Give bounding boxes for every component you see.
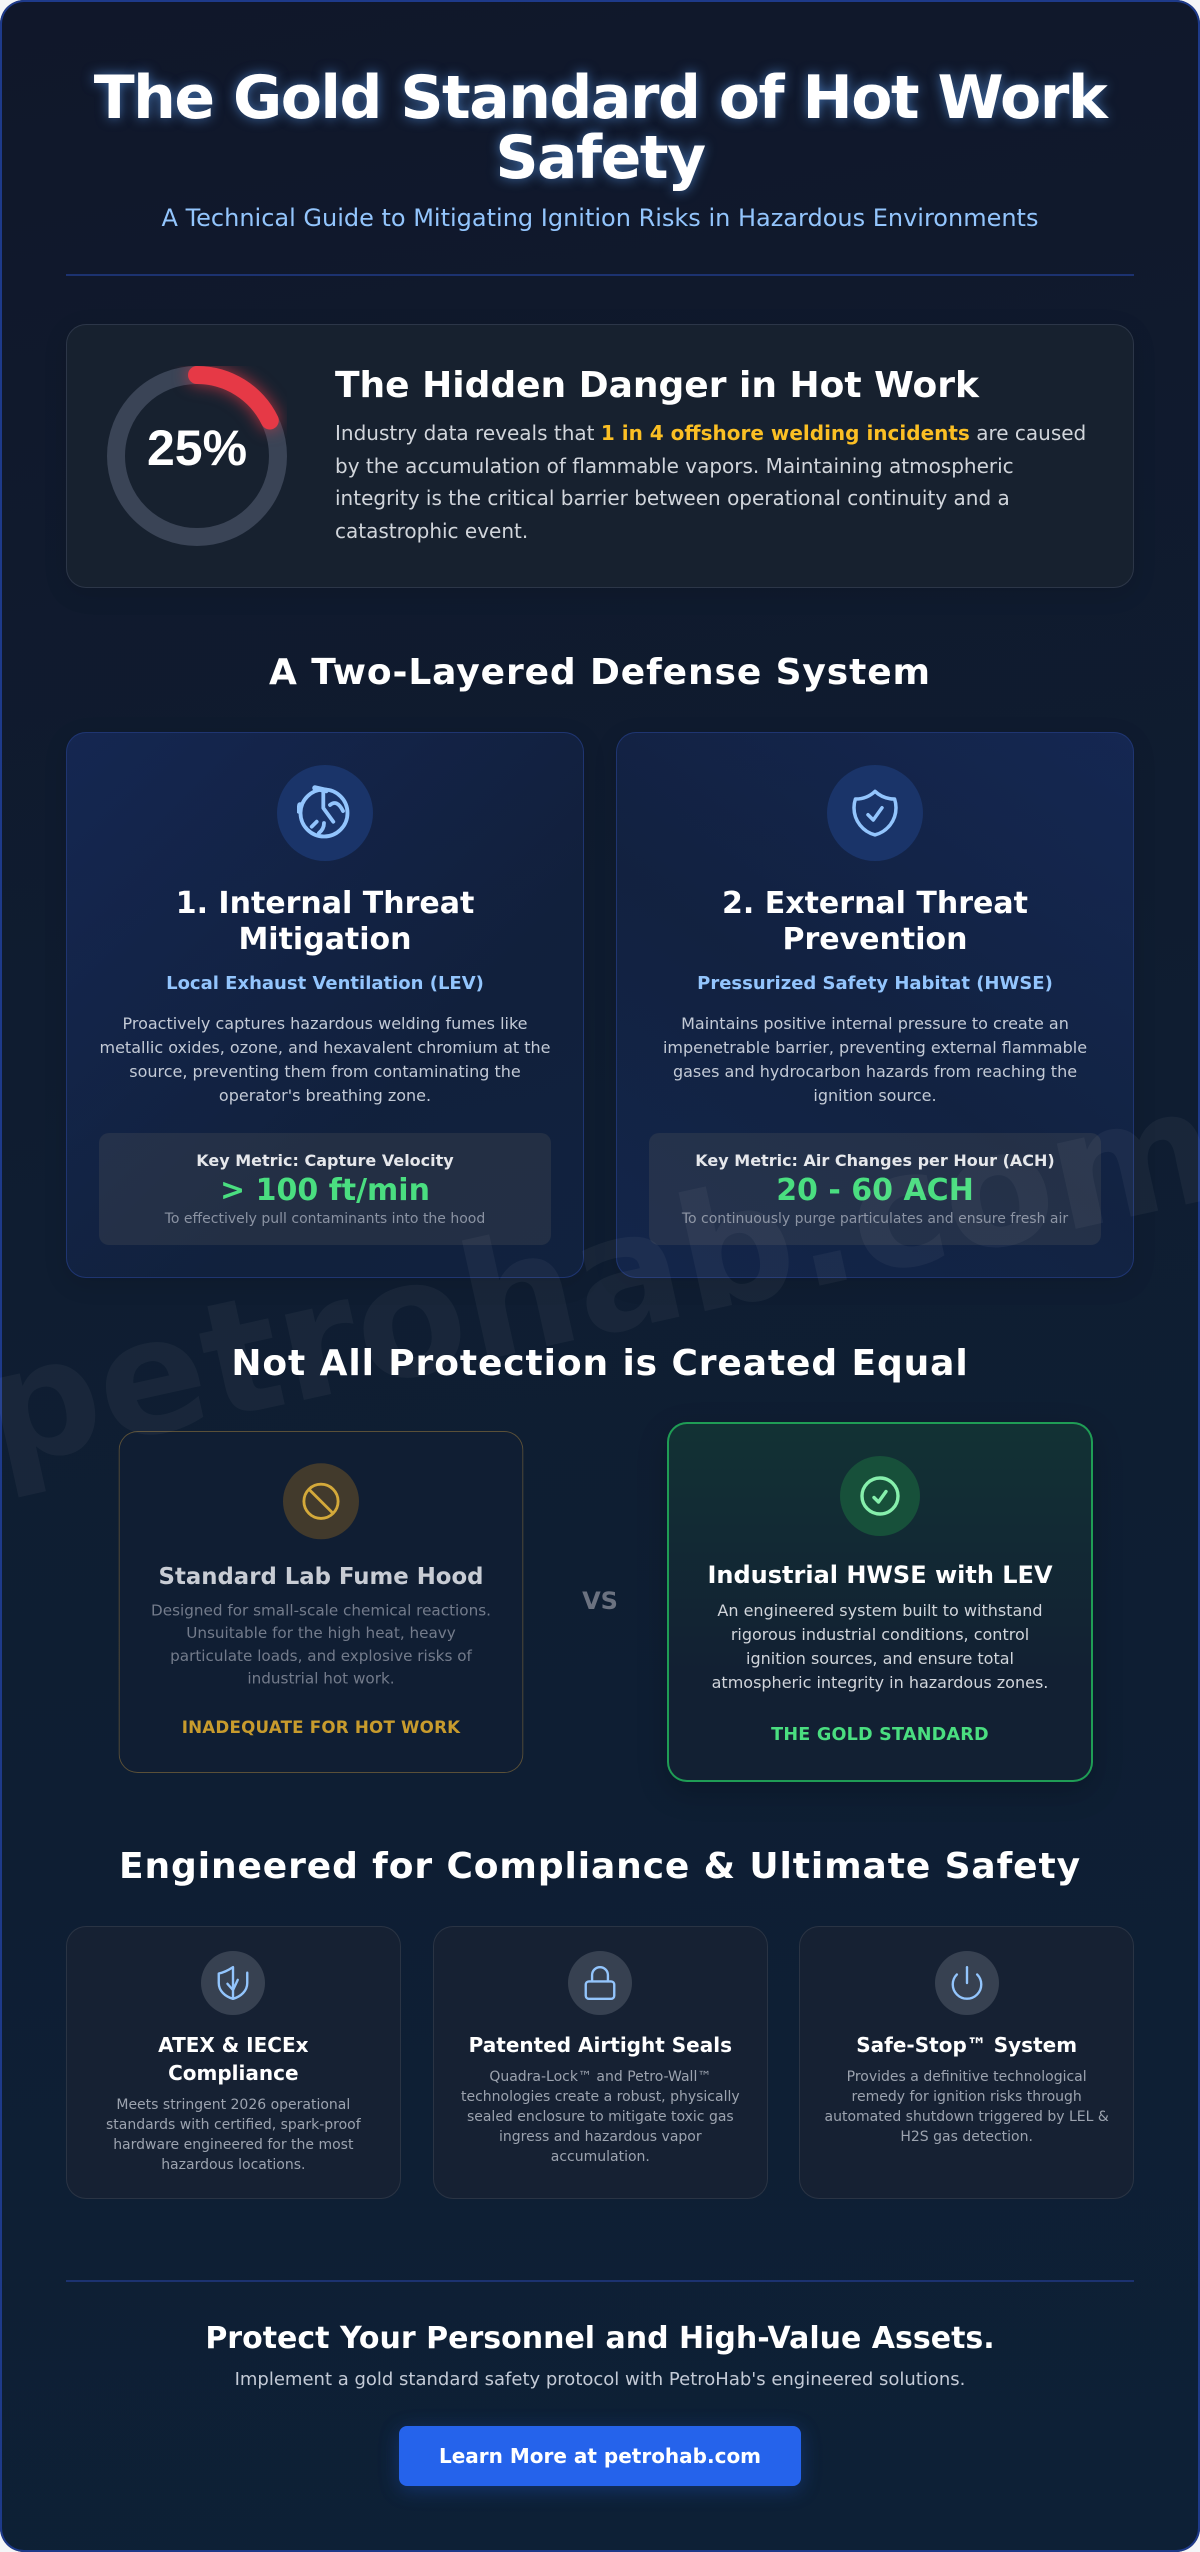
description: particulate loads, and explosive risks of [170,1647,471,1665]
description: Quadra-Lock™ and Petro-Wall™ [489,2069,711,2085]
description: atmospheric integrity in hazardous zones. [712,1673,1048,1692]
description: Unsuitable for the high heat, heavy [186,1624,455,1642]
heading: 1. Internal Threat [176,886,474,921]
description: Meets stringent 2026 operational [116,2097,350,2113]
metric note: To continuously purge particulates and ensure fresh air [682,1211,1068,1227]
call to action heading: Protect Your Personnel and High-Value Assets. [205,2321,995,2356]
verdict badge: THE GOLD STANDARD [771,1725,989,1745]
verdict badge: INADEQUATE FOR HOT WORK [181,1719,460,1738]
description [712,1601,1048,1692]
panel: industrial hwse [667,1422,1093,1782]
description: remedy for ignition risks through [852,2089,1082,2105]
description: technologies create a robust, physically [461,2089,740,2105]
heading: hidden danger: The Hidden Danger in Hot Work [335,364,979,406]
donut chart: 25%: 25% [147,420,247,476]
icon: power [935,1951,999,2015]
heading: not all protection: Not All Protection is Created Equal [231,1342,969,1384]
heading: Safe-Stop™ System [856,2033,1077,2057]
description [461,2069,740,2165]
description: rigorous industrial conditions, control [731,1625,1029,1644]
text: hidden danger body [335,421,1086,543]
description [663,1014,1087,1105]
description: standards with certified, spark-proof [106,2117,361,2133]
heading [158,2033,309,2085]
heading: Prevention [782,922,967,957]
icon: check circle [840,1456,920,1536]
subtitle: A Technical Guide to Mitigating Ignition Risks in Hazardous Environments [162,204,1038,232]
heading: engineered for compliance: Engineered for Compliance & Ultimate Safety [119,1846,1081,1886]
metric note: To effectively pull contaminants into the hood [165,1211,485,1227]
icon: shield [201,1951,265,2015]
title: Safety [495,122,705,192]
description: impenetrable barrier, preventing external flammable [663,1038,1087,1057]
description: operator's breathing zone. [219,1086,431,1105]
icon: shield check [827,765,923,861]
heading: 2. External Threat [722,886,1028,921]
description: sealed enclosure to mitigate toxic gas [467,2109,734,2125]
metric label: Key Metric: Air Changes per Hour (ACH) [695,1150,1055,1170]
vs label: VS [582,1587,618,1615]
heading: two-layered defense: A Two-Layered Defense System [269,652,931,692]
description [151,1601,490,1688]
heading: Compliance [168,2061,299,2085]
title [88,62,1112,198]
panel: safe-stop [799,1926,1134,2199]
description: industrial hot work. [247,1670,394,1688]
metric value: 20 - 60 ACH [776,1173,974,1208]
title: The Gold Standard of Hot Work [94,62,1106,132]
description: ignition source. [813,1086,937,1105]
donut chart: 25% [107,366,287,546]
metric label: Key Metric: Capture Velocity [196,1150,454,1170]
description: Provides a definitive technological [847,2069,1087,2085]
description [825,2069,1109,2145]
description: ignition sources, and ensure total [746,1649,1014,1668]
description: source, preventing them from contaminating the [129,1062,521,1081]
description: hardware engineered for the most [113,2137,353,2153]
description: hazardous locations. [161,2157,305,2173]
heading: Industrial HWSE with LEV [707,1561,1053,1589]
key metric [99,1133,551,1245]
description: accumulation. [551,2149,650,2165]
button: Learn More at petrohab.com [439,2444,761,2468]
subheading: Local Exhaust Ventilation (LEV) [166,973,484,994]
button [399,2426,801,2486]
panel: hidden danger [66,324,1134,588]
key metric [649,1133,1101,1245]
icon: prohibited [282,1463,358,1539]
call to action text: Implement a gold standard safety protocol with PetroHab's engineered solutions. [235,2369,965,2390]
text: hidden danger body: integrity is the critical barrier between operational continuity and a [335,486,1010,510]
metric value: > 100 ft/min [220,1173,430,1208]
description [99,1014,551,1105]
panel: internal threat [66,732,584,1278]
description: metallic oxides, ozone, and hexavalent chromium at the [99,1038,551,1057]
text: hidden danger body: catastrophic event. [335,519,528,543]
text: hidden danger body: by the accumulation of flammable vapors. Maintaining atmospheric [335,454,1014,478]
heading: Mitigation [238,922,412,957]
panel: airtight seals [433,1926,768,2199]
icon: lock [568,1951,632,2015]
description: Maintains positive internal pressure to create an [681,1014,1069,1033]
panel: atex compliance [66,1926,401,2199]
description: Proactively captures hazardous welding fumes like [122,1014,528,1033]
heading: ATEX & IECEx [158,2033,309,2057]
heading [176,886,474,957]
panel: standard lab fume hood [118,1431,523,1773]
description: An engineered system built to withstand [717,1601,1043,1620]
heading: Standard Lab Fume Hood [158,1563,483,1589]
description [106,2097,361,2173]
description: automated shutdown triggered by LEL & [825,2109,1109,2125]
text: hidden danger body: Industry data reveals that 1 in 4 offshore welding incidents are caused [335,421,1086,445]
description: ingress and hazardous vapor [499,2129,702,2145]
subheading: Pressurized Safety Habitat (HWSE) [697,973,1053,994]
panel: external threat [616,732,1134,1278]
description: gases and hydrocarbon hazards from reaching the [673,1062,1077,1081]
heading: Patented Airtight Seals [469,2033,732,2057]
icon: fume extraction [277,765,373,861]
description: H2S gas detection. [900,2129,1033,2145]
heading [722,886,1028,957]
description: Designed for small-scale chemical reactions. [151,1601,490,1619]
